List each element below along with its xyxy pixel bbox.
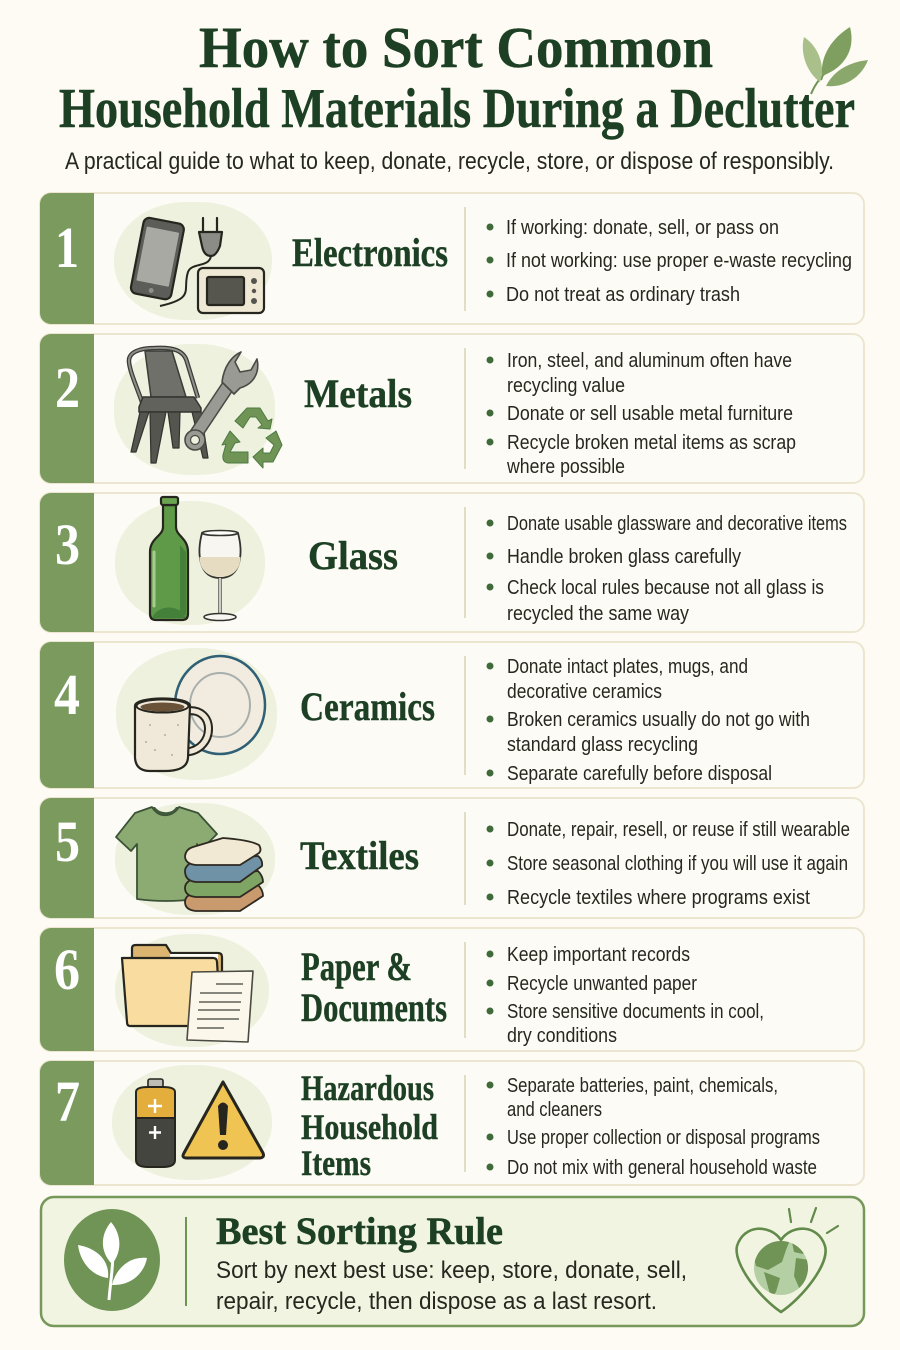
bullet list: metals: Iron, steel, and aluminum often have xyxy=(507,349,792,372)
panel: metals xyxy=(40,334,864,483)
bullet list: glass: Handle broken glass carefully xyxy=(507,545,742,568)
bullet list: hazardous: and cleaners xyxy=(507,1098,602,1121)
bullet list: textiles: Recycle textiles where programs exist xyxy=(507,886,810,909)
heading: Hazardous Household Items: Hazardous xyxy=(301,1068,434,1108)
bullet list: metals: where possible xyxy=(506,455,625,478)
bullet list: hazardous xyxy=(486,1074,820,1179)
bullet list: glass: Check local rules because not all glass is xyxy=(507,576,824,599)
panel: glass xyxy=(40,493,864,632)
number 4: 4 xyxy=(54,662,80,727)
bullet list: hazardous: Use proper collection or disposal programs xyxy=(507,1126,820,1149)
bullet list: textiles xyxy=(486,818,850,909)
bullet list: ceramics: Broken ceramics usually do not go with xyxy=(507,708,810,731)
title xyxy=(59,15,855,140)
number 3: 3 xyxy=(55,512,80,577)
rule text: Sort by next best use: keep, store, donate, sell, xyxy=(216,1257,687,1284)
bullet list: hazardous: Separate batteries, paint, chemicals, xyxy=(507,1074,778,1097)
heading: Paper & Documents xyxy=(301,944,447,1030)
icon: mug and plate xyxy=(116,648,277,780)
heading: Glass: Glass xyxy=(308,533,398,578)
rule text: repair, recycle, then dispose as a last resort. xyxy=(216,1288,657,1315)
panel: best sorting rule xyxy=(41,1197,864,1326)
title: How to Sort Common xyxy=(199,15,713,80)
bullet list: metals: Recycle broken metal items as scrap xyxy=(507,431,796,454)
heading: Paper & Documents: Documents xyxy=(301,985,447,1030)
bullet list: metals: recycling value xyxy=(507,374,625,397)
heading: Textiles: Textiles xyxy=(300,833,419,878)
panel: electronics xyxy=(40,193,864,324)
bullet list: paper: Recycle unwanted paper xyxy=(507,972,697,995)
number 7: 7 xyxy=(55,1069,80,1134)
heading: Hazardous Household Items: Household xyxy=(301,1107,438,1147)
icon: battery and warning sign xyxy=(112,1065,272,1180)
number 5 xyxy=(40,798,94,918)
bullet list: paper: Store sensitive documents in cool, xyxy=(507,1000,764,1023)
heading: Hazardous Household Items xyxy=(301,1068,438,1183)
bullet list: glass xyxy=(486,512,847,625)
bullet list: paper: dry conditions xyxy=(507,1024,617,1047)
number 7 xyxy=(40,1061,94,1185)
bullet list: ceramics: Separate carefully before disposal xyxy=(507,762,772,785)
bullet list: metals: Donate or sell usable metal furniture xyxy=(507,402,793,425)
number 5: 5 xyxy=(55,809,80,874)
number 6 xyxy=(40,928,94,1051)
bullet list: electronics: If working: donate, sell, or pass on xyxy=(506,216,779,239)
heading: Electronics: Electronics xyxy=(292,230,448,275)
icon: globe in heart xyxy=(737,1208,838,1312)
heading: Best Sorting Rule: Best Sorting Rule xyxy=(216,1210,503,1253)
icon: chair, wrench and recycling xyxy=(114,344,282,475)
bullet list: electronics xyxy=(486,216,852,306)
rule text xyxy=(216,1257,687,1315)
panel: paper and documents xyxy=(40,928,864,1051)
number 6: 6 xyxy=(54,937,80,1002)
number 2: 2 xyxy=(55,355,80,420)
number 1: 1 xyxy=(55,215,79,280)
number 3 xyxy=(40,493,94,632)
icon: leaves decoration xyxy=(803,27,868,94)
icon: bottle and wine glass xyxy=(115,497,265,625)
number 2 xyxy=(40,334,94,483)
bullet list: paper xyxy=(486,943,764,1047)
number 4 xyxy=(40,642,94,788)
heading: Ceramics: Ceramics xyxy=(300,684,435,729)
heading: Hazardous Household Items: Items xyxy=(301,1143,371,1183)
bullet list: hazardous: Do not mix with general household waste xyxy=(507,1156,817,1179)
bullet list: electronics: Do not treat as ordinary trash xyxy=(506,283,740,306)
number 1 xyxy=(40,193,94,324)
heading: Paper & Documents: Paper & xyxy=(301,944,412,989)
bullet list: ceramics: Donate intact plates, mugs, and xyxy=(507,655,748,678)
panel: textiles xyxy=(40,798,864,918)
bullet list: paper: Keep important records xyxy=(507,943,690,966)
bullet list: ceramics: decorative ceramics xyxy=(507,680,662,703)
icon: phone, plug and microwave xyxy=(114,202,272,320)
bullet list: glass: recycled the same way xyxy=(507,602,690,625)
panel: hazardous household items xyxy=(40,1061,864,1185)
bullet list: electronics: If not working: use proper e-waste recycling xyxy=(506,249,852,272)
heading: Metals: Metals xyxy=(304,371,412,416)
icon: shirt and folded towels xyxy=(115,803,275,915)
bullet list: ceramics: standard glass recycling xyxy=(507,733,698,756)
bullet list: ceramics xyxy=(486,655,810,785)
icon: white sprout in green circle xyxy=(64,1209,160,1311)
icon: folder and document xyxy=(115,934,269,1047)
bullet list: metals xyxy=(486,349,796,478)
panel: ceramics xyxy=(40,642,864,788)
